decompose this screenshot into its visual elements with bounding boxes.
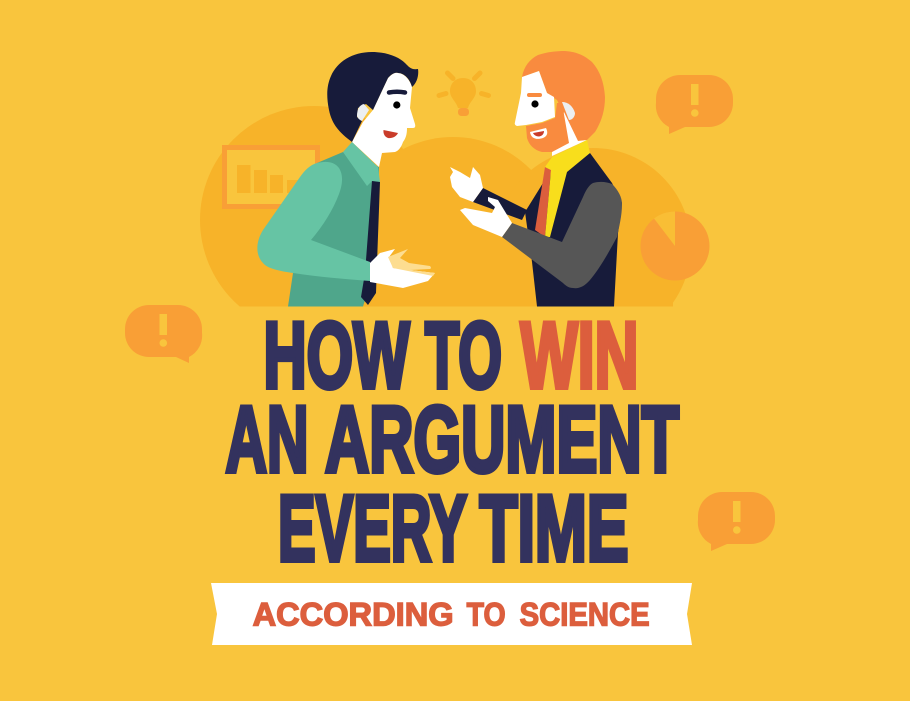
tongue bbox=[533, 131, 544, 136]
ear bbox=[357, 104, 369, 121]
title word: WIN: WIN bbox=[520, 302, 638, 408]
yellow collar and shirt bbox=[545, 140, 590, 237]
eyebrow bbox=[529, 93, 540, 97]
tie bbox=[361, 181, 380, 305]
jacket bbox=[525, 153, 622, 306]
infographic header bbox=[125, 51, 775, 645]
hand highlight bbox=[388, 249, 435, 276]
icon: bar chart frame bbox=[224, 148, 318, 206]
title line 3: EVERY bbox=[278, 476, 467, 580]
title bbox=[226, 302, 679, 580]
eye bbox=[531, 100, 539, 108]
hair bbox=[522, 51, 605, 141]
eyebrow bbox=[389, 90, 405, 95]
title line 1: TO bbox=[425, 302, 502, 408]
subtitle text: SCIENCE bbox=[520, 596, 650, 632]
back arm bbox=[473, 188, 527, 220]
arm bbox=[257, 162, 370, 281]
speech bubble: lower right bbox=[698, 492, 775, 551]
title line 1: HOW bbox=[264, 302, 410, 408]
subtitle ribbon bbox=[211, 583, 692, 645]
beard bbox=[526, 103, 569, 152]
speech bubble: top right bbox=[656, 75, 733, 134]
subtitle text: TO bbox=[467, 596, 506, 632]
ear bbox=[562, 102, 575, 120]
upper hand bbox=[450, 167, 483, 202]
tie bbox=[535, 167, 551, 237]
torso bbox=[288, 152, 379, 306]
subtitle text bbox=[253, 596, 650, 632]
title line 3: TIME bbox=[480, 476, 628, 580]
neck bbox=[552, 112, 587, 156]
sleeve bbox=[502, 182, 622, 288]
face bbox=[352, 73, 415, 167]
mouth bbox=[530, 128, 547, 139]
hair bbox=[327, 52, 418, 142]
icon: pie chart bbox=[640, 211, 710, 280]
icon: light bulb bbox=[439, 73, 488, 116]
lower hand bbox=[460, 197, 512, 237]
subtitle text: ACCORDING bbox=[253, 596, 454, 632]
title line 2 bbox=[226, 386, 679, 492]
hand bbox=[370, 249, 435, 288]
mouth bbox=[383, 130, 398, 138]
man on the right with beard bbox=[450, 51, 622, 306]
eye bbox=[393, 101, 400, 109]
face bbox=[515, 71, 555, 126]
man on the left in green bbox=[257, 52, 435, 306]
background hills bbox=[200, 106, 685, 306]
speech bubble: left bbox=[125, 305, 202, 363]
title line 2: AN bbox=[226, 386, 308, 492]
collar bbox=[343, 142, 380, 186]
title line 2: ARGUMENT bbox=[325, 386, 679, 492]
